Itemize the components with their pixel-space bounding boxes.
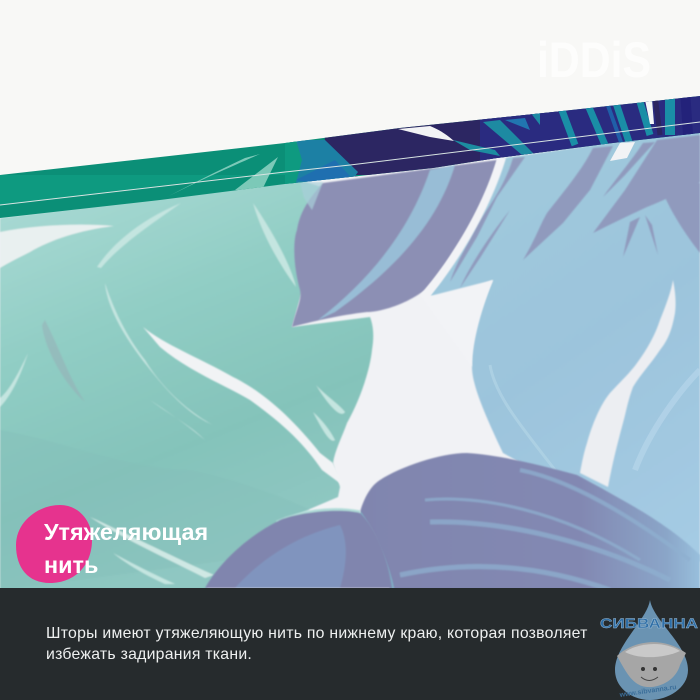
logo url: www.sibvanna.ru	[618, 684, 677, 699]
photo: shower curtain fabric with leaf print	[0, 96, 700, 588]
callout heading: Утяжеляющая	[44, 519, 208, 545]
pale vein on blue leaf	[490, 365, 555, 470]
lavender leaf top	[292, 160, 497, 327]
veins	[0, 203, 345, 584]
small white diamond	[610, 142, 635, 161]
callout heading: нить	[44, 552, 98, 578]
description text: избежать задирания ткани.	[46, 646, 252, 662]
shade	[42, 320, 85, 402]
watermark logo: sibvanna	[600, 600, 698, 700]
icon: bathtub	[617, 642, 686, 687]
white sliver between top leaves	[420, 158, 506, 367]
icon: face	[641, 667, 658, 680]
white sliver on blue leaf	[580, 280, 676, 487]
fabric base	[0, 128, 700, 590]
teal leaf	[0, 180, 373, 590]
lavender leaf bottom left	[205, 511, 392, 588]
logo word: СИБВАННА	[600, 615, 698, 631]
description text: Шторы имеют утяжеляющую нить по нижнему краю, которая позволяет	[46, 625, 588, 642]
white sliver on teal leaf	[143, 327, 345, 487]
callout heading	[44, 519, 208, 578]
description text	[46, 625, 588, 662]
lavender streaks on blue leaf	[450, 135, 700, 288]
blue leaf right	[430, 130, 700, 562]
bottom dark band	[0, 588, 700, 700]
white patch top-left	[0, 225, 114, 268]
icon: water drop	[615, 600, 688, 700]
lavender leaf bottom right	[360, 453, 700, 590]
curtain hem with stitching	[0, 90, 700, 220]
